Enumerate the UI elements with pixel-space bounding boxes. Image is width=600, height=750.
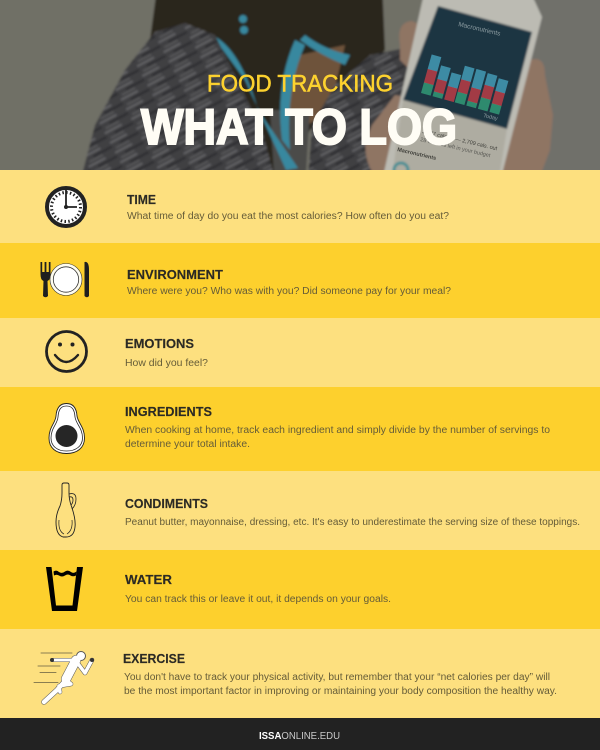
- header photo: legs and phone: [0, 0, 600, 170]
- text: time: What time of day do you eat the most calories? How often do you eat?: [127, 211, 449, 222]
- panel: ingredients: [0, 387, 600, 471]
- icon: running figure: [34, 652, 94, 702]
- panel: water: [0, 550, 600, 629]
- text: ingredients: determine your total intake.: [125, 439, 250, 450]
- heading: exercise: EXERCISE: [123, 652, 185, 666]
- heading: ingredients: INGREDIENTS: [125, 405, 212, 419]
- text: condiments: Peanut butter, mayonnaise, dressing, etc. It's easy to underestimate the serving size of these toppings.: [125, 517, 580, 528]
- phone screen text: Today: [483, 113, 498, 122]
- text: environment: Where were you? Who was with you? Did someone pay for your meal?: [127, 286, 451, 297]
- icon: oil bottle: [56, 483, 76, 537]
- title: WHAT TO LOG: [141, 99, 457, 155]
- heading: environment: ENVIRONMENT: [127, 268, 223, 282]
- heading: time: TIME: [127, 193, 156, 207]
- footer: [0, 718, 600, 750]
- phone chart bars: [421, 54, 510, 115]
- text: exercise: be the most important factor in improving or maintaining your body composition the healthy way.: [124, 686, 557, 697]
- icon: clock: [47, 188, 85, 226]
- phone screen text: Macronutrients: [458, 21, 502, 38]
- panel: condiments: [0, 471, 600, 550]
- heading: emotions: EMOTIONS: [125, 337, 194, 351]
- text: ingredients: When cooking at home, track each ingredient and simply divide by the number of servings to: [125, 425, 550, 436]
- panel: environment: [0, 243, 600, 318]
- text: exercise: [124, 672, 557, 697]
- footer url: ISSAONLINE.EDU: [259, 731, 340, 742]
- icon: plate with fork and knife: [40, 262, 89, 297]
- text: ingredients: [125, 425, 550, 450]
- icon: glass of water: [46, 567, 83, 611]
- heading: water: WATER: [125, 573, 172, 587]
- panel: exercise: [0, 629, 600, 718]
- text: emotions: How did you feel?: [125, 358, 208, 369]
- phone screen text: 28 calories left in your budget: [420, 137, 491, 159]
- icon: avocado: [49, 404, 84, 454]
- panel: time: [0, 170, 600, 243]
- text: water: You can track this or leave it out, it depends on your goals.: [125, 594, 391, 605]
- phone screen text: Macronutrients: [397, 147, 437, 162]
- phone screen text: [397, 21, 502, 162]
- text: exercise: You don't have to track your physical activity, but remember that your “net calories per day” will: [124, 672, 550, 683]
- panel: emotions: [0, 318, 600, 387]
- subtitle: FOOD TRACKING: [207, 70, 393, 98]
- heading: condiments: CONDIMENTS: [125, 497, 208, 511]
- icon: smiley face: [46, 332, 86, 372]
- phone screen text: 2,737 cals. in — 2,709 cals. out: [422, 129, 498, 152]
